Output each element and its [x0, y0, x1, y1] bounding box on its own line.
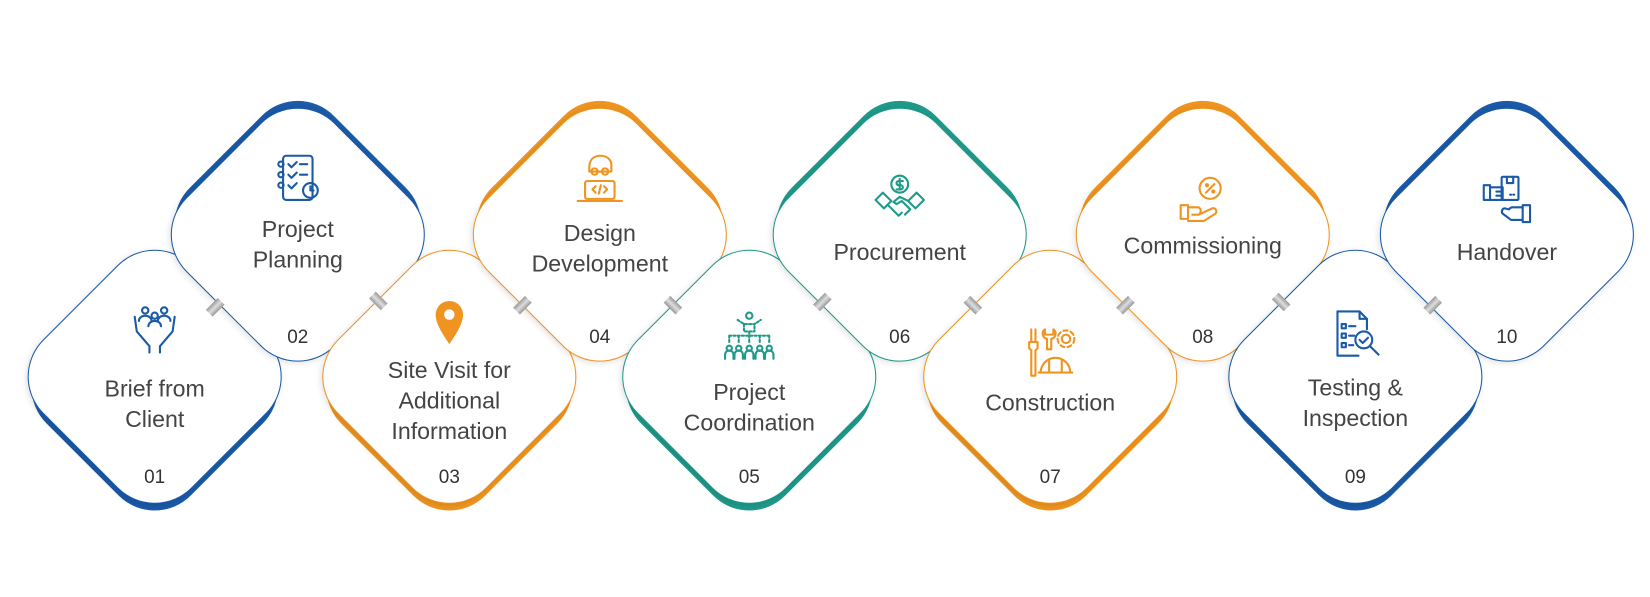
- label: Inspection: [1303, 405, 1408, 431]
- label: Additional: [398, 387, 500, 414]
- label: Commissioning: [1124, 233, 1282, 259]
- step 03: Site Visit: [319, 250, 576, 510]
- step 07: Construction: [920, 250, 1178, 510]
- icon: hierarchy of people: [724, 312, 774, 360]
- label: Site Visit for: [388, 357, 511, 383]
- connector 08-09: [1272, 293, 1290, 311]
- icon: handshake with coin: [874, 174, 925, 217]
- step 01: Brief from Client: [24, 250, 282, 510]
- label: Coordination: [684, 409, 815, 436]
- number: 03: [439, 466, 460, 487]
- number: 10: [1496, 326, 1517, 347]
- label: Project: [713, 379, 785, 405]
- label: Testing &: [1308, 375, 1403, 401]
- label: Development: [532, 250, 668, 277]
- connector 09-10: [1423, 296, 1442, 314]
- label: Brief from: [105, 376, 205, 402]
- number: 09: [1345, 466, 1366, 487]
- label: [1303, 375, 1408, 431]
- step 05: Project Coordination: [619, 250, 876, 510]
- label: Construction: [985, 389, 1115, 416]
- number: 07: [1040, 466, 1061, 487]
- connector 07-08: [1116, 296, 1135, 314]
- icon: checklist: [277, 154, 319, 201]
- icon: hand with percent coin: [1180, 176, 1222, 222]
- step 09: Testing & Inspection: [1225, 250, 1482, 510]
- step 02: Project Planning: [168, 100, 425, 365]
- label: [532, 220, 668, 277]
- label: Information: [391, 418, 507, 444]
- label: [388, 357, 511, 444]
- icon: designer at laptop: [576, 154, 623, 202]
- label: Procurement: [833, 239, 966, 265]
- connector 03-04: [513, 296, 532, 314]
- number: 06: [889, 326, 910, 347]
- label: [105, 376, 205, 432]
- connector 04-05: [664, 296, 682, 314]
- label: Client: [125, 406, 184, 432]
- step 10: Handover: [1376, 100, 1634, 365]
- icon: tools and helmet: [1028, 328, 1076, 377]
- icon: handing over a box: [1482, 176, 1532, 224]
- label: [684, 379, 815, 436]
- icon: people in hands: [134, 306, 176, 354]
- number: 04: [589, 326, 610, 347]
- connector 02-03: [369, 292, 388, 310]
- label: Planning: [253, 246, 343, 273]
- step 08: Commissioning: [1072, 100, 1330, 365]
- connector 05-06: [813, 293, 832, 311]
- number: 01: [144, 466, 165, 487]
- step 04: Design Development: [470, 100, 727, 365]
- connector 01-02: [206, 298, 224, 317]
- number: 08: [1192, 326, 1213, 347]
- connector 06-07: [964, 296, 982, 314]
- number: 05: [739, 466, 760, 487]
- label: [253, 216, 343, 273]
- number: 02: [287, 326, 308, 347]
- icon: document with magnifier: [1336, 310, 1380, 357]
- label: Project: [262, 216, 334, 242]
- icon: location pin: [436, 301, 463, 344]
- step 06: Procurement: [770, 100, 1027, 365]
- label: Handover: [1457, 239, 1557, 265]
- label: Design: [564, 220, 636, 246]
